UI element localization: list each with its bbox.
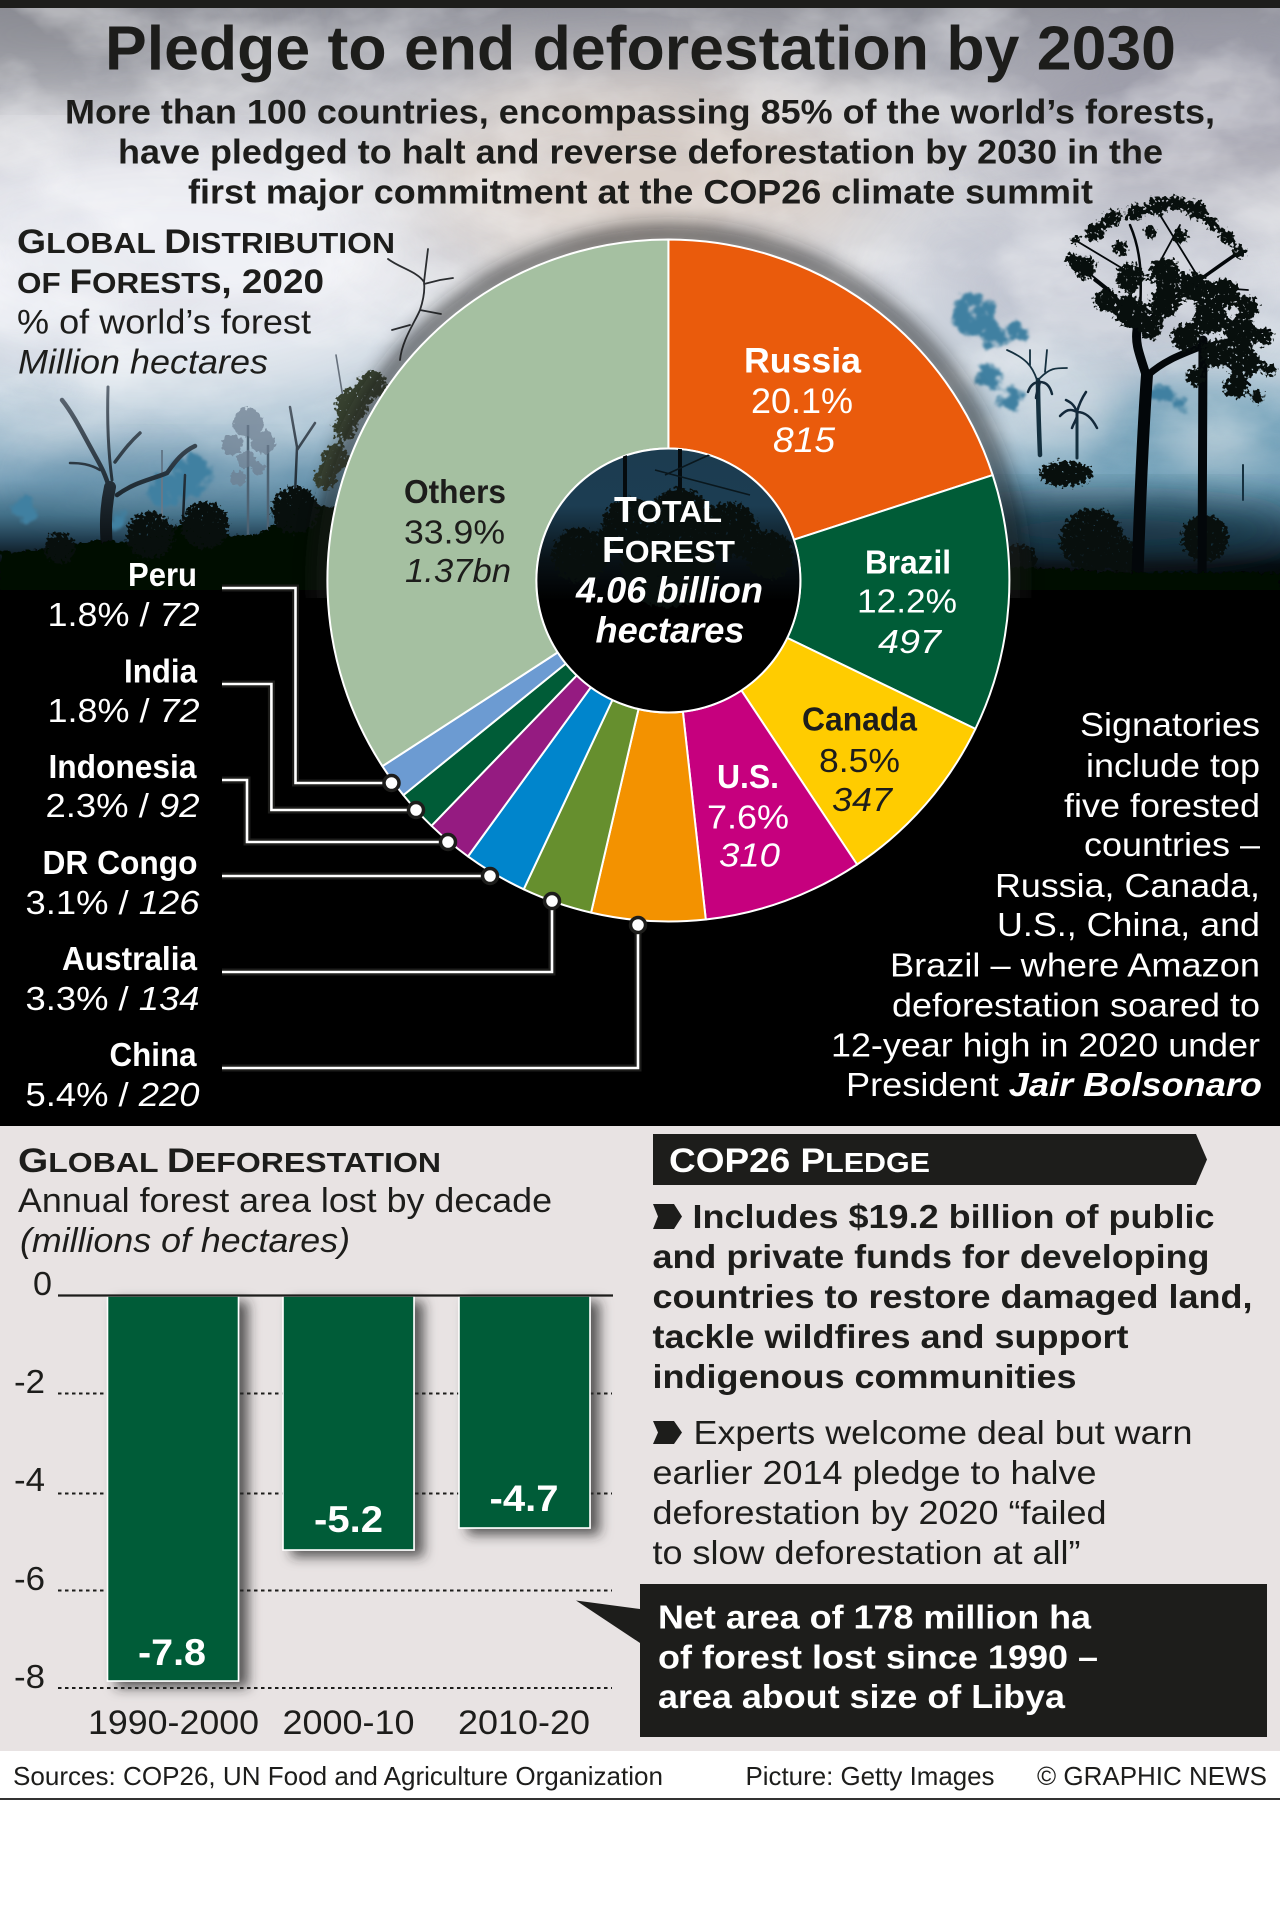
far blue tree shapes right [949, 291, 1192, 415]
slice: Others [327, 240, 668, 766]
bar: 2010-20 [459, 1296, 590, 1528]
heading: global distribution of forests [17, 223, 395, 382]
chart heading [18, 1142, 552, 1260]
label: Others: Others [404, 473, 506, 510]
slice: Canada [741, 638, 975, 864]
label: China: 5.4% / 220 [26, 1076, 200, 1113]
footer credits: © GRAPHIC NEWS [1037, 1761, 1267, 1791]
label: Canada: 8.5% [819, 742, 900, 779]
heading: global distribution of forests: GLOBAL DISTRIBUTION [17, 223, 395, 261]
label: Australia: Australia [62, 940, 198, 977]
decade labels [88, 1704, 590, 1742]
label: Indonesia: Indonesia [48, 748, 197, 785]
pledge funding text: countries to restore damaged land, [652, 1278, 1252, 1315]
y axis labels: -6 [14, 1560, 45, 1597]
label: Others: 1.37bn [405, 552, 511, 589]
callout: net area lost [576, 1584, 1267, 1737]
large tree crowns right [1062, 193, 1279, 406]
label: Australia: 3.3% / 134 [26, 980, 200, 1017]
lower panel background [0, 1126, 1280, 1751]
chart heading: (millions of hectares) [20, 1222, 350, 1260]
label: Canada [802, 700, 918, 818]
pledge funding text: and private funds for developing [652, 1238, 1210, 1275]
decade labels: 2010-20 [458, 1704, 590, 1742]
olive tree near donut [311, 368, 389, 492]
slice: India [403, 664, 577, 826]
label: Russia: Russia [744, 342, 862, 380]
y axis labels: -8 [14, 1658, 45, 1695]
signatories text block: President Jair Bolsonaro [846, 1067, 1262, 1104]
label: DR Congo: 3.1% / 126 [26, 884, 200, 921]
subtitle [65, 94, 1215, 212]
experts text: to slow deforestation at all” [652, 1534, 1080, 1571]
top bar [0, 0, 1280, 8]
label: India [48, 652, 200, 729]
label: Brazil: 12.2% [857, 582, 957, 620]
callout: net area lost: Net area of 178 million ha [658, 1598, 1092, 1636]
dead tree behind donut left [388, 249, 453, 360]
donut glow [310, 210, 1030, 598]
signatories text block: 12-year high in 2020 under [831, 1028, 1260, 1064]
label: Peru: Peru [128, 556, 197, 593]
subtitle: have pledged to halt and reverse deforestation by 2030 in the [118, 134, 1163, 172]
palm crowns right [1028, 382, 1097, 428]
slice: China [591, 709, 706, 922]
label: Canada: 347 [832, 781, 894, 818]
y axis labels: -2 [14, 1363, 45, 1400]
marker dots [384, 776, 646, 932]
pledge funding text: Includes $19.2 billion of public [692, 1198, 1214, 1235]
label: Brazil [857, 544, 957, 660]
footer credits [13, 1761, 1267, 1791]
label: Russia: 815 [773, 421, 836, 460]
signatories text block: deforestation soared to [892, 988, 1260, 1024]
label: Others [404, 473, 511, 589]
heading: global distribution of forests: Million hectares [18, 344, 268, 382]
large tree trunks right [1070, 215, 1270, 590]
panel: global deforestation bar chart [14, 1142, 613, 1742]
slice: DR Congo [468, 687, 612, 889]
label: DR Congo: DR Congo [42, 844, 198, 881]
signatories text block: five forested [1064, 788, 1260, 825]
donut centre total: TOTAL [614, 489, 722, 530]
label: India: 1.8% / 72 [48, 692, 200, 729]
grid lines [58, 1394, 612, 1688]
bar values: -4.7 [490, 1478, 558, 1519]
donut centre total: hectares [596, 610, 744, 650]
label: Russia [744, 342, 862, 460]
label: Others: 33.9% [404, 514, 505, 550]
label: Brazil: 497 [878, 623, 943, 660]
bullet arrow [653, 1421, 682, 1444]
y axis labels: -4 [14, 1461, 45, 1498]
donut centre with photo [536, 448, 800, 712]
label: China: China [110, 1036, 197, 1073]
label: Peru [48, 556, 200, 633]
label: China [26, 1036, 200, 1113]
bar values: -5.2 [314, 1499, 383, 1540]
heading: global distribution of forests: OF FORESTS , 2020 [17, 263, 324, 301]
decade labels: 1990-2000 [88, 1704, 259, 1742]
zero line [58, 1294, 613, 1297]
signatories text block [831, 707, 1262, 1104]
signatories text block: Brazil – where Amazon [890, 948, 1260, 984]
slice: Brazil [787, 475, 1009, 729]
experts text: earlier 2014 pledge to halve [652, 1454, 1096, 1491]
signatories text block: countries – [1084, 827, 1260, 864]
footer credits: Sources: COP26, UN Food and Agriculture Organization [13, 1761, 663, 1791]
title: Pledge to end deforestation by 2030 [105, 14, 1176, 84]
signatories text block: Signatories [1080, 707, 1260, 744]
panel: COP26 pledge [652, 1134, 1252, 1571]
donut centre total: 4.06 billion [575, 570, 763, 610]
label: U.S.: 7.6% [707, 798, 789, 836]
label: U.S. [707, 758, 789, 874]
label: Peru: 1.8% / 72 [48, 596, 200, 633]
bar: 2000-10 [283, 1296, 414, 1550]
y axis labels: 0 [33, 1265, 52, 1302]
subtitle: More than 100 countries, encompassing 85% of the world’s forests, [65, 94, 1215, 132]
decade labels: 2000-10 [282, 1704, 414, 1742]
callout: net area lost: area about size of Libya [658, 1678, 1066, 1715]
label: India: India [124, 652, 198, 690]
far blue tree shapes left [9, 451, 214, 533]
chart heading: Annual forest area lost by decade [18, 1182, 552, 1220]
heading: global distribution of forests: % of world’s forest [17, 304, 312, 342]
pale pine [162, 408, 275, 535]
label: Russia: 20.1% [751, 382, 853, 421]
dead trees left [62, 355, 345, 560]
slice: Peru [382, 652, 566, 795]
label: Indonesia: 2.3% / 92 [46, 787, 200, 824]
label: Indonesia [46, 748, 200, 824]
heading banner [653, 1134, 1207, 1185]
connector lines to small slices [222, 588, 646, 1068]
pledge funding text: tackle wildfires and support [652, 1318, 1129, 1355]
bar values [138, 1478, 558, 1673]
black lower background [0, 590, 1280, 1126]
callout: net area lost: of forest lost since 1990 – [658, 1638, 1098, 1676]
experts text: Experts welcome deal but warn [694, 1414, 1192, 1451]
signatories text block: Russia, Canada, [995, 868, 1260, 905]
signatories text block: include top [1086, 748, 1260, 785]
donut centre total [575, 489, 763, 650]
label: U.S.: U.S. [717, 758, 779, 795]
donut chart: global distribution of forests [327, 240, 1009, 922]
label: Canada: Canada [802, 700, 918, 738]
chart heading: GLOBAL DEFORESTATION [18, 1142, 441, 1180]
bushes right [1009, 458, 1230, 571]
forest floor silhouette [0, 504, 334, 590]
label: U.S.: 310 [719, 836, 781, 874]
donut centre total: FOREST [602, 529, 735, 570]
subtitle: first major commitment at the COP26 climate summit [188, 174, 1093, 212]
signatories text block: U.S., China, and [997, 907, 1260, 944]
slice: Russia [668, 240, 993, 540]
label: Australia [26, 940, 200, 1017]
slice: Australia [524, 700, 638, 913]
bar values: -7.8 [138, 1632, 206, 1673]
experts text [652, 1414, 1192, 1571]
slice: U.S. [683, 690, 857, 920]
bullet arrow [653, 1204, 682, 1229]
slice: Indonesia [432, 675, 591, 856]
experts text: deforestation by 2020 “failed [652, 1494, 1106, 1531]
pledge funding text [652, 1198, 1252, 1395]
bar: 1990-2000 [108, 1296, 238, 1681]
y axis labels [14, 1265, 52, 1695]
label: Brazil: Brazil [865, 544, 951, 580]
label: DR Congo [26, 844, 200, 921]
pledge funding text: indigenous communities [652, 1358, 1076, 1395]
banner text: COP26 P LEDGE [669, 1142, 930, 1180]
footer credits: Picture: Getty Images [746, 1761, 994, 1791]
dead trees right [1007, 350, 1243, 500]
background photo: smoke over burning forest [0, 0, 1280, 600]
